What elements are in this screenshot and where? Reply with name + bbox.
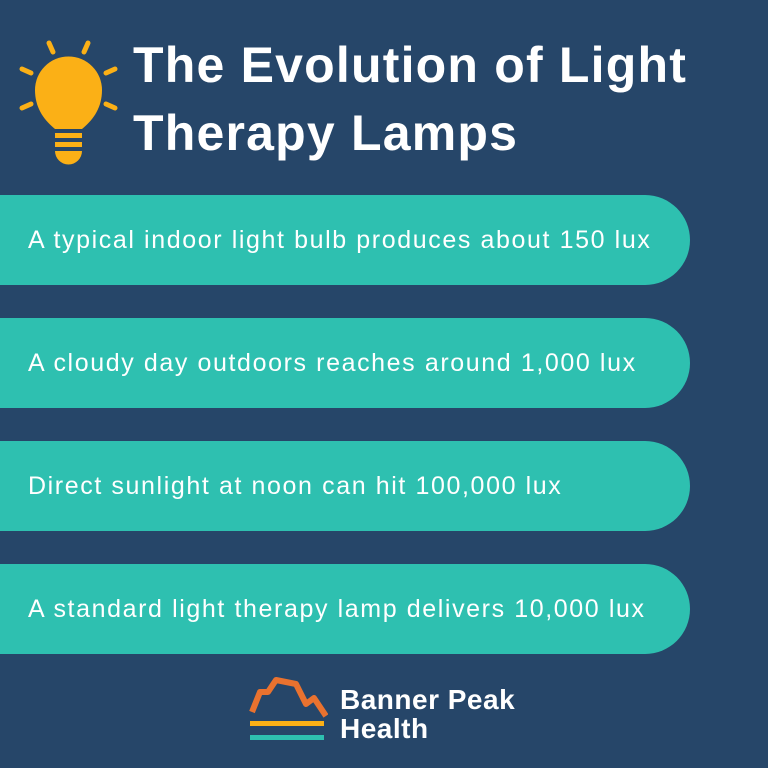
- icon: light bulb: [20, 40, 118, 164]
- logo text: [340, 684, 515, 744]
- panel: sunlight: [0, 441, 690, 531]
- panel: cloudy day: A cloudy day outdoors reaches around 1,000 lux: [28, 349, 637, 377]
- panel: cloudy day: [0, 318, 690, 408]
- panel: therapy lamp: A standard light therapy lamp delivers 10,000 lux: [28, 595, 646, 623]
- icon: mountain logo: [249, 677, 328, 740]
- panel: indoor bulb: A typical indoor light bulb produces about 150 lux: [28, 226, 651, 254]
- title: [133, 37, 687, 161]
- panel: therapy lamp: [0, 564, 690, 654]
- logo text: Banner Peak: [340, 684, 515, 715]
- title: Therapy Lamps: [133, 105, 518, 161]
- title: The Evolution of Light: [133, 37, 687, 93]
- panel: sunlight: Direct sunlight at noon can hit 100,000 lux: [28, 472, 562, 500]
- panel: indoor bulb: [0, 195, 690, 285]
- logo text: Health: [340, 713, 429, 744]
- logo: [249, 677, 515, 744]
